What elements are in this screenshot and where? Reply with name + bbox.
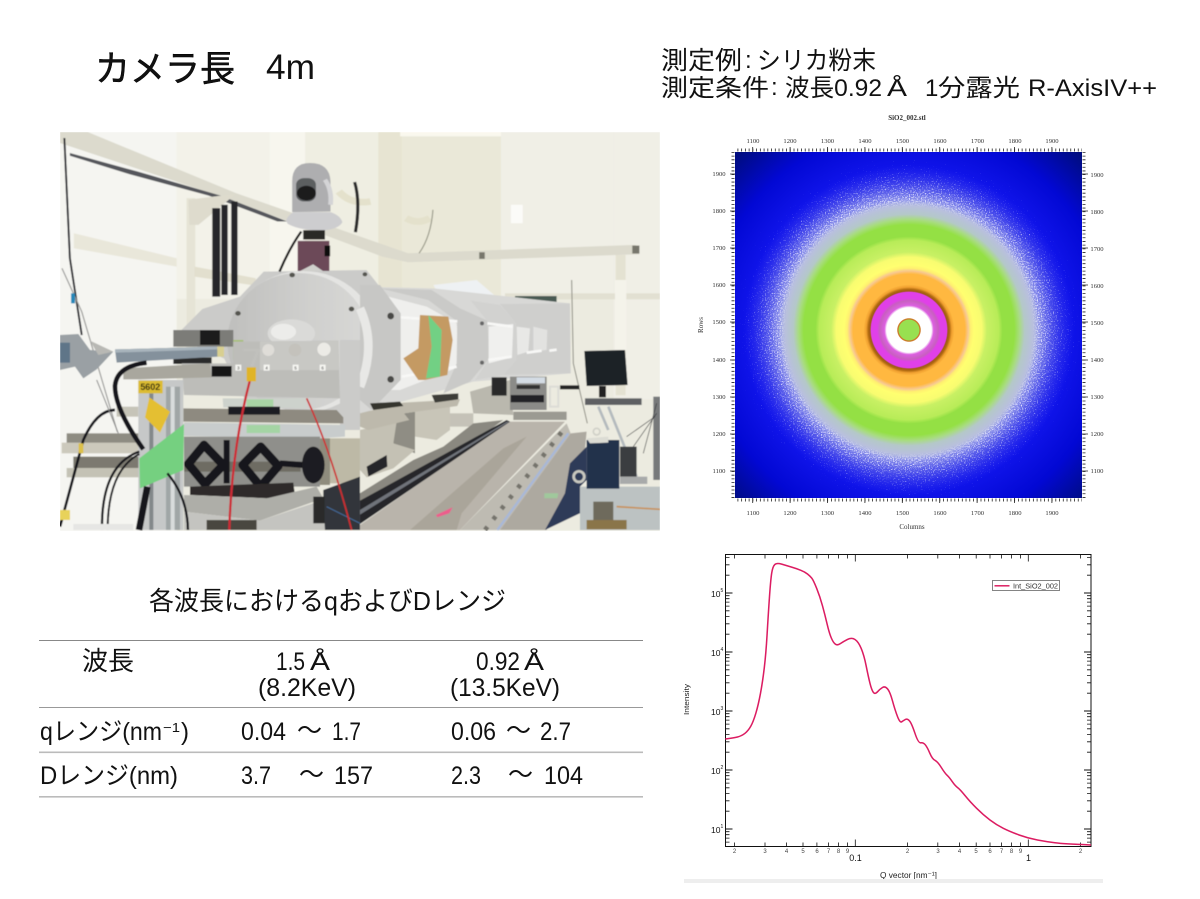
x axis labels: 2 [906,849,910,855]
q range row: 2.7 [540,718,571,746]
photo: far cylinder sections [360,285,571,413]
y axis labels: 5 [720,588,724,594]
x axis labels: 8 [837,849,841,855]
header row: (8.2KeV) [258,674,356,702]
q range row: ) [181,718,189,746]
photo: sample plate: 5 [294,365,297,370]
left axis labels: 1700 [712,245,726,252]
photo: red cables and coupling [229,350,352,530]
D range row: ～ [299,761,324,789]
photo: cable tray [60,132,639,262]
y axis labels: 3 [720,706,724,712]
measurement conditions: 測定例 [661,47,742,75]
legend [992,580,1060,590]
D range row: ～ [508,761,533,789]
table rules [39,640,643,798]
x axis labels: 2 [1079,849,1083,855]
y axis ticks [726,557,1090,846]
q range row: ～ [297,717,322,745]
left axis labels: 1500 [712,319,726,326]
x axis labels: 0.1 [849,853,862,863]
photo: upper stage bar [123,363,212,379]
q range row: 1.7 [332,718,361,746]
measurement conditions: Å [887,74,907,102]
photo: monitor and desk [584,350,660,484]
header row: 0.92 [476,648,520,676]
intensity curve [725,564,1091,845]
photo: camera on mount [280,163,342,272]
x axis labels: 6 [988,849,992,855]
photo: yellow cable marker [79,443,83,453]
D range row: 2.3 [451,762,481,790]
bottom axis labels: 1600 [933,510,947,517]
top axis labels: 1800 [1008,138,1022,145]
top axis labels: 1300 [821,138,835,145]
photo: upper scene [60,132,660,531]
header row: 1.5 [276,648,305,676]
photo: top fittings [173,330,243,364]
header row: (13.5KeV) [450,674,560,702]
left axis labels: 1600 [712,282,726,289]
axis ticks [730,147,1088,503]
x axis title: Q vector [nm⁻¹] [880,870,937,880]
header row: Å [310,646,330,676]
photo: rails behind post [62,407,140,477]
y axis labels [711,588,724,835]
left axis labels: 1800 [712,208,726,215]
x axis ticks [734,554,1080,846]
left axis labels [712,171,726,475]
y axis labels: 10 [711,766,721,776]
title [95,48,315,89]
photo: beam pipe and clamp [60,334,224,378]
y axis labels: 10 [711,589,721,599]
right axis labels: 1800 [1090,209,1104,216]
measurement conditions: 分露光 [938,75,1020,102]
right axis labels: 1600 [1090,283,1104,290]
photo: sample plate [182,341,340,398]
x axis labels: 5 [801,849,805,855]
photo: base plates and motor [184,483,325,530]
q range row [40,717,571,746]
x axis labels: 3 [936,849,940,855]
top axis labels: 1700 [971,138,985,145]
D range row [40,761,583,790]
q range row: −1 [163,720,180,735]
top axis labels [747,138,1059,145]
photo: support post with tape and label [138,380,184,530]
bottom axis labels: 1200 [783,510,797,517]
x axis labels: 9 [846,849,850,855]
D range row: Dレンジ(nm) [40,762,178,790]
photo: wall background [60,132,660,531]
table heading: 各波長におけるqおよびDレンジ [149,586,506,616]
D range row: 3.7 [241,762,271,790]
q range row: ～ [506,717,531,745]
photo: sample stage and support post [60,330,360,530]
x axis labels: 7 [827,849,831,855]
measurement conditions: : [771,74,778,101]
photo: scissor jack and knob [188,440,303,487]
measurement conditions: : [745,47,752,74]
photo: flange [182,270,378,414]
photo: flange side and pedestal [320,340,360,530]
measurement conditions: 波長0.92 [785,75,882,102]
photo: bottom-left details [60,510,133,530]
photo: floor and vacuum-path rail [360,420,660,530]
y axis labels: 10 [711,707,721,717]
wavelength range table [39,640,643,798]
x axis labels [733,849,1083,863]
top axis labels: 1900 [1045,138,1059,145]
measurement conditions: 測定条件 [661,75,769,102]
detector image with rings [735,152,1082,498]
right axis labels: 1500 [1090,320,1104,327]
photo: cables on wall [62,138,238,432]
x axis labels: 3 [763,849,767,855]
title: カメラ長 [95,48,235,89]
photo: 4m camera-length beamline [60,132,660,531]
measurement conditions [661,47,1157,102]
photo: support post with tape and label: 5602 [140,382,160,392]
bottom axis labels: 1500 [896,510,910,517]
left axis labels: 1100 [713,468,726,475]
screenshot edge strip [684,879,1103,883]
x axis labels: 9 [1019,849,1023,855]
legend: Int_SiO2_002 [1013,583,1058,590]
x axis labels: 2 [733,849,737,855]
photo: lower rails and plates [183,398,345,487]
bottom axis labels: 1100 [747,510,760,517]
top axis labels: 1600 [933,138,947,145]
D range row: 104 [544,762,583,790]
right axis labels: 1700 [1090,246,1104,253]
SAXS intensity line chart [682,537,1091,880]
title: 4m [266,48,315,87]
measurement conditions: R-AxisIV++ [1028,75,1157,102]
y axis labels: 4 [720,647,724,653]
q range row: 0.06 [451,718,496,746]
x axis labels: 8 [1010,849,1014,855]
bottom axis labels: 1300 [821,510,835,517]
right axis labels [1090,172,1104,475]
photo: sample plate: 3 [237,365,240,370]
measurement conditions: 1 [925,75,938,102]
header row: 波長 [82,646,134,676]
x axis labels: 6 [815,849,819,855]
header row: Å [524,646,544,676]
y axis labels: 2 [720,765,724,771]
bottom axis labels: 1700 [971,510,985,517]
header row [82,646,560,702]
photo: beam tube, rail and right side [360,280,660,530]
left axis labels: 1300 [712,394,726,401]
diffraction image: SiO2 powder 2D pattern [697,114,1104,531]
y axis labels: 10 [711,825,721,835]
right axis labels: 1400 [1090,357,1104,364]
photo: sample plate: 6 [321,365,324,370]
photo: knob [302,447,325,483]
D range row: 157 [334,762,373,790]
bottom axis labels: 1400 [858,510,872,517]
x axis labels: 4 [958,849,962,855]
right axis labels: 1200 [1090,431,1104,438]
top axis labels: 1200 [783,138,797,145]
x axis labels: 4 [785,849,789,855]
y axis labels: 10 [711,648,721,658]
left axis labels: 1200 [712,431,726,438]
x axis labels: 1 [1026,853,1031,863]
photo: black cables [60,363,188,530]
photo: paper bag with green tape [403,315,453,380]
photo: white wall equipment top [434,280,494,295]
x axis labels: 7 [1000,849,1004,855]
bottom axis labels: 1900 [1045,510,1059,517]
photo: sample plate: 4 [265,365,268,370]
axis title: rows: Rows [697,317,705,333]
measurement conditions: シリカ粉末 [757,47,876,75]
x axis labels: 5 [974,849,978,855]
y axis title: Intensity [682,684,691,715]
q range row: qレンジ(nm [40,718,162,746]
right axis labels: 1100 [1091,468,1104,475]
q range row: 0.04 [241,718,286,746]
axis title: columns: Columns [899,523,925,531]
right axis labels: 1900 [1090,172,1104,179]
bottom axis labels: 1800 [1008,510,1022,517]
top axis labels: 1400 [858,138,872,145]
right axis labels: 1300 [1090,394,1104,401]
plot frame [726,554,1091,846]
photo: supports under tube [360,377,579,477]
top axis labels: 1100 [747,138,760,145]
top axis labels: 1500 [896,138,910,145]
left axis labels: 1400 [712,357,726,364]
bottom axis labels [747,510,1059,517]
y axis labels: 1 [720,824,724,830]
left axis labels: 1900 [712,171,726,178]
chart title: SiO2_002.stl [888,114,926,122]
